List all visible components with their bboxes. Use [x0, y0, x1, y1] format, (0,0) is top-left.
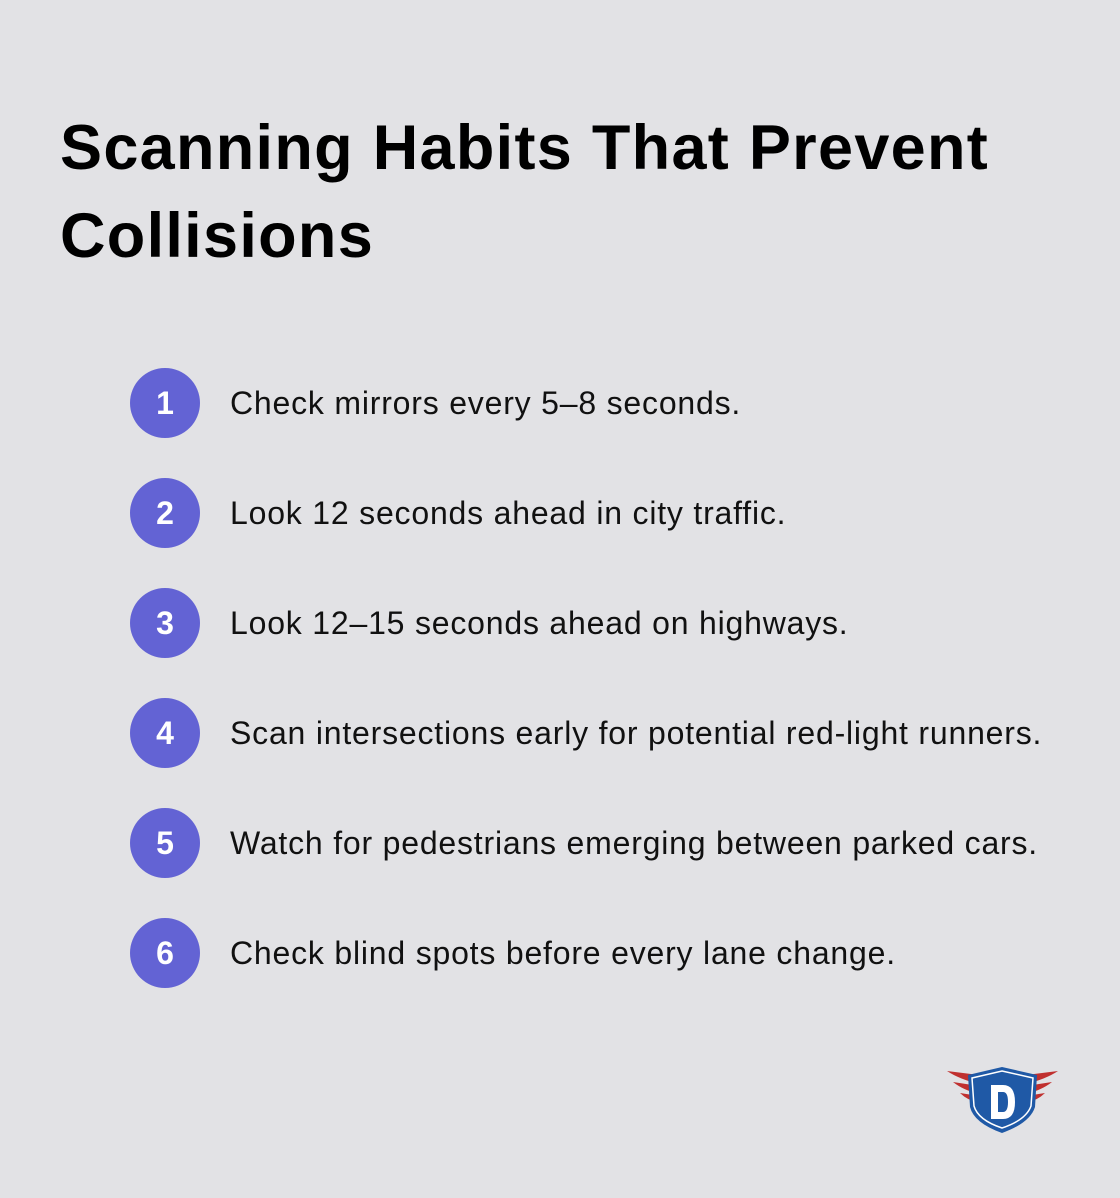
- item 1: [130, 368, 741, 438]
- item 3: 3: [156, 605, 174, 641]
- title: Collisions: [60, 201, 374, 271]
- item 2: [130, 478, 786, 548]
- item 5: 5: [156, 825, 174, 861]
- item 4: Scan intersections early for potential red-light runners.: [230, 715, 1042, 751]
- item 2: Look 12 seconds ahead in city traffic.: [230, 495, 786, 531]
- item 1: Check mirrors every 5–8 seconds.: [230, 385, 741, 421]
- item 6: [130, 918, 896, 988]
- item 4: [130, 698, 1042, 768]
- item 6: 6: [156, 935, 174, 971]
- item 1: 1: [156, 385, 174, 421]
- item 2: 2: [156, 495, 174, 531]
- item 5: [130, 808, 1038, 878]
- logo: [947, 1067, 1058, 1133]
- item 3: Look 12–15 seconds ahead on highways.: [230, 605, 848, 641]
- item 4: 4: [156, 715, 174, 751]
- title: Scanning Habits That Prevent: [60, 113, 989, 183]
- item 3: [130, 588, 848, 658]
- item 5: Watch for pedestrians emerging between parked cars.: [230, 825, 1038, 861]
- item 6: Check blind spots before every lane change.: [230, 935, 896, 971]
- title: [60, 113, 989, 271]
